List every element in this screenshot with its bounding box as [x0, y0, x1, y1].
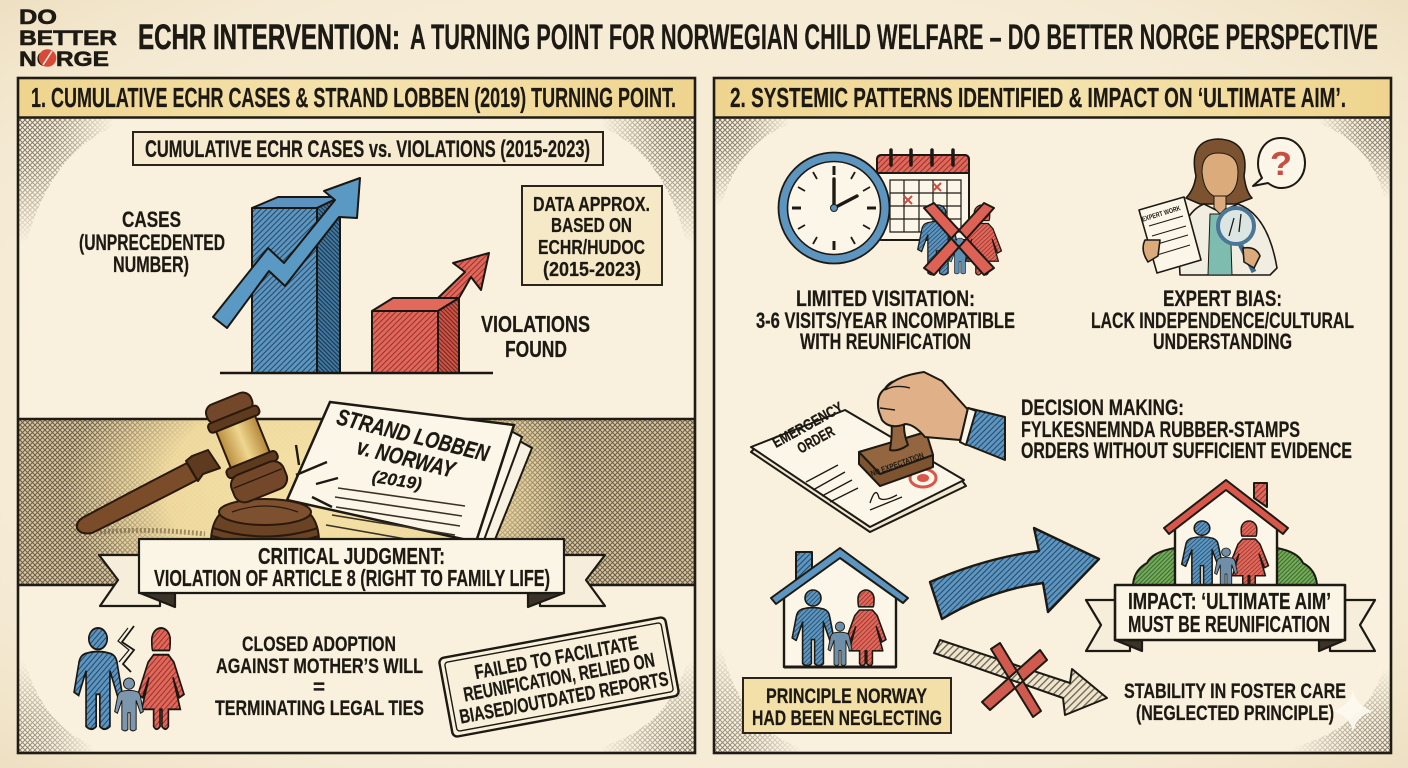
data source box: DATA APPROX. — [533, 193, 650, 216]
text: closed adoption: AGAINST MOTHER’S WILL — [216, 655, 423, 678]
ribbon banner: ultimate aim: MUST BE REUNIFICATION — [1128, 611, 1330, 637]
text: expert bias: EXPERT BIAS: — [1163, 286, 1282, 311]
document: Strand Lobben v. Norway: STRAND LOBBEN — [334, 404, 492, 467]
title: ECHR INTERVENTION: — [138, 18, 400, 57]
data source box: BASED ON — [551, 214, 632, 237]
text: stability in foster care: (NEGLECTED PRINCIPLE) — [1136, 702, 1334, 725]
text: closed adoption: TERMINATING LEGAL TIES — [215, 697, 424, 720]
text: decision making — [1021, 395, 1352, 463]
logo: Do Better Norge — [19, 5, 118, 71]
label: cases: (UNPRECEDENTED — [79, 230, 225, 255]
text: expert bias: UNDERSTANDING — [1153, 329, 1292, 354]
label: violations — [481, 311, 590, 362]
icon: biased expert — [1139, 138, 1305, 275]
text: limited visitation: WITH REUNIFICATION — [800, 329, 971, 354]
stamp callout: failed to facilitate: BIASED/OUTDATED REPORTS — [458, 668, 670, 729]
icon: clock — [778, 152, 890, 264]
sparkle mark — [1333, 690, 1373, 732]
bar: cases — [252, 197, 340, 373]
panel: systemic patterns and impact — [714, 78, 1391, 753]
text: stability in foster care — [1124, 680, 1346, 725]
panel: cumulative ECHR cases and Strand Lobben — [18, 78, 695, 753]
label: violations: FOUND — [505, 336, 567, 362]
arrow: cases trend — [213, 178, 360, 328]
bar: violations — [372, 298, 459, 373]
text: closed adoption — [215, 633, 424, 720]
ribbon banner: ultimate aim: IMPACT: ‘ULTIMATE AIM’ — [1128, 588, 1331, 614]
text: limited visitation: 3-6 VISITS/YEAR INCOMPATIBLE — [756, 308, 1015, 333]
logo: Do Better Norge: NORGE — [19, 47, 109, 71]
icon: biased expert: ? — [1270, 145, 1292, 182]
document: Strand Lobben v. Norway: (2019) — [371, 467, 423, 494]
ribbon banner: ultimate aim — [1086, 585, 1375, 651]
icon: emergency order being stamped: NO EXPECTATION — [869, 451, 925, 478]
bar chart — [213, 178, 493, 373]
panel heading: 1. CUMULATIVE ECHR CASES & STRAND LOBBEN (2019) TURNING POINT. — [31, 82, 676, 113]
icon: reunified family house — [1133, 480, 1317, 590]
text: decision making: DECISION MAKING: — [1021, 395, 1184, 420]
hatched judgment band — [19, 418, 694, 586]
icon: calendar — [877, 150, 969, 240]
ribbon banner: critical judgment — [99, 539, 605, 607]
text: limited visitation: LIMITED VISITATION: — [796, 286, 975, 311]
icon: emergency order being stamped: EMERGENCY — [770, 399, 846, 452]
arrow: violations trend — [438, 253, 489, 298]
document: Strand Lobben v. Norway: v. NORWAY — [354, 433, 460, 483]
icon: house with family — [771, 548, 908, 667]
text: stability in foster care: STABILITY IN FOSTER CARE — [1124, 680, 1346, 703]
text: expert bias — [1091, 286, 1354, 354]
logo: Do Better Norge: BETTER — [19, 26, 118, 50]
label: cases: CASES — [122, 207, 181, 232]
ribbon banner: critical judgment: VIOLATION OF ARTICLE 8 (RIGHT TO FAMILY LIFE) — [154, 565, 550, 591]
icon: family crossed out — [918, 203, 1002, 275]
icon: biased expert: EXPERT WORK — [1141, 205, 1182, 224]
logo: Do Better Norge: DO — [19, 5, 57, 29]
data source box — [522, 186, 662, 285]
label: principle Norway neglected: HAD BEEN NEGLECTING — [752, 706, 942, 730]
text: limited visitation — [756, 286, 1015, 354]
data source box: (2015-2023) — [543, 258, 641, 281]
stamp callout: failed to facilitate: REUNIFICATION, RELIED ON — [462, 649, 657, 706]
text: decision making: FYLKESNEMNDA RUBBER-STAMPS — [1021, 417, 1300, 442]
icon: red cross — [982, 643, 1047, 717]
data source box: ECHR/HUDOC — [538, 236, 645, 259]
stamp callout: failed to facilitate — [439, 617, 679, 737]
chart heading box — [133, 132, 603, 165]
text: closed adoption: = — [313, 676, 325, 699]
panel heading — [18, 78, 695, 118]
arrow: towards reunification — [930, 528, 1099, 619]
ribbon banner: critical judgment: CRITICAL JUDGMENT: — [258, 543, 445, 569]
label: principle Norway neglected: PRINCIPLE NORWAY — [766, 684, 927, 708]
label: cases: NUMBER) — [113, 252, 189, 277]
chart heading box: CUMULATIVE ECHR CASES vs. VIOLATIONS (2015-2023) — [145, 136, 590, 163]
icon: emergency order being stamped: ORDER — [794, 423, 838, 457]
icon: separated family — [74, 626, 184, 731]
label: cases — [79, 207, 225, 277]
label: violations: VIOLATIONS — [481, 311, 590, 337]
text: closed adoption: CLOSED ADOPTION — [242, 633, 396, 656]
icon: emergency order being stamped — [751, 372, 1005, 532]
icon: judge gavel — [77, 388, 319, 544]
arrow: rejected foster care path — [934, 640, 1107, 717]
label: principle Norway neglected — [743, 678, 951, 733]
stamp callout: failed to facilitate: FAILED TO FACILITATE — [473, 632, 640, 684]
document: Strand Lobben v. Norway — [287, 402, 532, 545]
